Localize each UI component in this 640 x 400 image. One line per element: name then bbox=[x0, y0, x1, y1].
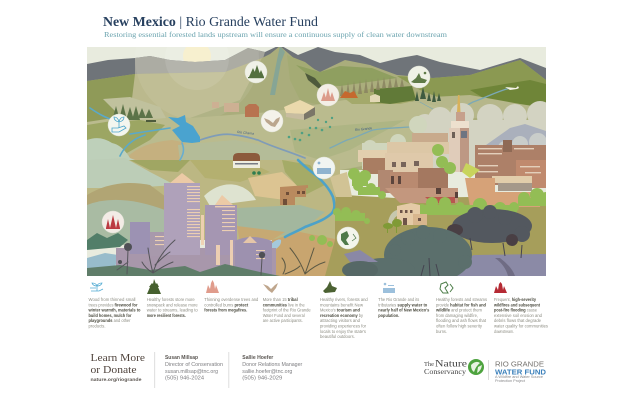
crop fields bbox=[288, 117, 333, 141]
column 3: thinning: controlled burns protect bbox=[204, 302, 249, 307]
column 3: thinning bbox=[204, 280, 259, 313]
bell tower bbox=[449, 95, 469, 172]
column 2: healthy forests: water to streams, leading to bbox=[147, 308, 198, 313]
column 1: forest products: winter warmth, materials to bbox=[88, 308, 141, 313]
back mountain ridge bbox=[87, 47, 546, 81]
icon: sapling in hand bbox=[90, 283, 103, 291]
green shrubs bbox=[309, 144, 552, 247]
contact: Sallie Hoefer: Donor Relations Manager bbox=[242, 362, 303, 368]
column 5: tourism bbox=[320, 281, 368, 339]
column 8: post-fire flooding: post-fire flooding cause bbox=[494, 308, 537, 313]
call to action: learn more: Learn More bbox=[90, 352, 145, 364]
column 4: tribal communities: Water Fund and several bbox=[263, 313, 305, 318]
map icon: handshake bbox=[261, 110, 283, 132]
column 7: fish and wildlife: from damaging wildfire, bbox=[436, 313, 478, 318]
column 4: tribal communities bbox=[263, 283, 311, 323]
column 7: fish and wildlife: often follow high severity bbox=[436, 324, 483, 328]
column 8: post-fire flooding: extensive soil erosion and bbox=[494, 313, 543, 318]
subtitle: Restoring essential forested lands upstream will ensure a continuous supply of clean water downstream bbox=[104, 30, 447, 39]
town bbox=[358, 133, 546, 207]
column 5: tourism: attracting visitors and bbox=[320, 318, 361, 323]
column 1: forest products: trees provides firewood for bbox=[88, 302, 138, 307]
column 3: thinning: Thinning overdense trees and bbox=[204, 297, 259, 302]
ranch barn bbox=[284, 100, 315, 120]
column 7: fish and wildlife: wildlife and protect them bbox=[435, 308, 482, 313]
call to action: learn more: or Donate bbox=[90, 364, 137, 376]
contact: Sallie Hoefer: sallie.hoefer@tnc.org bbox=[242, 369, 293, 375]
column 3: thinning: forests from megafires. bbox=[204, 308, 247, 313]
logo: Rio Grande Water Fund: RIO GRANDE bbox=[495, 360, 544, 368]
foreground vegetation left bbox=[87, 233, 325, 276]
column 8: post-fire flooding: debris flows that degrade bbox=[494, 318, 542, 323]
icon: bird and fish bbox=[440, 282, 453, 293]
icon: water town bbox=[383, 283, 395, 293]
column 7: fish and wildlife bbox=[435, 282, 488, 334]
logo: The Nature Conservancy: Nature bbox=[435, 360, 467, 370]
logo: Rio Grande Water Fund: A Wildfire and Water Source bbox=[495, 375, 543, 379]
map icon: fish and wildlife bbox=[337, 227, 359, 249]
small green trees bbox=[383, 219, 402, 233]
logo: Rio Grande Water Fund: WATER FUND bbox=[495, 368, 546, 376]
city skyline bbox=[116, 173, 276, 276]
pale ridge with conifers bbox=[103, 97, 166, 121]
column 5: tourism: locals to enjoy the state's bbox=[320, 329, 367, 334]
icon: conifers bbox=[147, 279, 161, 294]
column 5: tourism: Mexico's tourism and bbox=[320, 308, 360, 313]
column 4: tribal communities: More than 15 tribal bbox=[263, 297, 298, 302]
contact: Sallie Hoefer: (505) 946-2029 bbox=[242, 376, 283, 382]
column 1: forest products: build homes, mulch for bbox=[88, 313, 132, 318]
contact: Sallie Hoefer bbox=[242, 355, 303, 382]
logo: The Nature Conservancy bbox=[424, 359, 484, 376]
visitor center building bbox=[233, 153, 261, 175]
contact: Susan Millsap: Director of Conservation bbox=[165, 362, 223, 368]
river label Rio Grande: Rio Grande bbox=[355, 126, 372, 132]
logo: The Nature Conservancy: Conservancy bbox=[424, 367, 466, 376]
column 6: water supply: The Rio Grande and its bbox=[378, 297, 420, 302]
pueblo house on the valley floor bbox=[280, 185, 308, 205]
column 5: tourism: recreation economy by bbox=[320, 313, 364, 318]
column 5: tourism: mountains benefit New bbox=[320, 302, 364, 307]
contact: Susan Millsap: susan.millsap@tnc.org bbox=[165, 369, 218, 375]
column 8: post-fire flooding: downstream. bbox=[494, 329, 514, 334]
logo: Rio Grande Water Fund bbox=[495, 360, 546, 383]
call to action: learn more bbox=[90, 352, 145, 383]
column 8: post-fire flooding: Frequent, high-severity bbox=[494, 297, 536, 302]
cloud bank right bbox=[419, 101, 546, 168]
map icon: healthy forest bbox=[245, 61, 267, 83]
column 1: forest products: products. bbox=[88, 324, 106, 328]
column 8: post-fire flooding: wildfires and subsequent bbox=[493, 302, 540, 307]
cloud bank left of town bbox=[362, 116, 418, 169]
contact: Susan Millsap: (505) 946-2024 bbox=[165, 376, 204, 382]
column 2: healthy forests: more resilient forests. bbox=[147, 313, 186, 318]
airplane bbox=[505, 86, 519, 90]
column 2: healthy forests: snowpack and release more bbox=[147, 302, 198, 307]
title: New Mexico | Rio Grande Water Fund bbox=[103, 14, 318, 29]
river label Rio Chama: Rio Chama bbox=[237, 130, 254, 136]
icon: red trees bbox=[494, 282, 507, 293]
column 4: tribal communities: footprint of the Rio Grande bbox=[263, 308, 311, 313]
dark oak trees bbox=[342, 205, 546, 283]
column 6: water supply: nearly half of New Mexico's bbox=[378, 308, 430, 313]
column 8: post-fire flooding: water quality for communities bbox=[494, 324, 549, 328]
foreground pueblo bbox=[388, 203, 427, 226]
mid valley shapes bbox=[87, 100, 450, 170]
contact: Susan Millsap: Susan Millsap bbox=[165, 355, 198, 361]
column 6: water supply: tributaries supply water to bbox=[378, 302, 428, 307]
hillside pueblos bbox=[212, 102, 239, 112]
column 7: fish and wildlife: flooding and ash flows that bbox=[436, 318, 487, 323]
panel: watershed illustration bbox=[87, 47, 546, 276]
rivers bbox=[90, 88, 510, 237]
column 1: forest products: Wood from thinned small bbox=[88, 297, 136, 302]
icon: handshake bbox=[263, 283, 278, 293]
column 7: fish and wildlife: provide habitat for fish and bbox=[436, 302, 486, 307]
icon: pink trees bbox=[206, 280, 219, 293]
column 4: tribal communities: are active participants. bbox=[263, 318, 303, 323]
column 1: forest products: playgrounds and other bbox=[88, 318, 131, 323]
wildfire on slope bbox=[340, 91, 358, 98]
column 2: healthy forests bbox=[147, 279, 198, 318]
small lodge bbox=[370, 94, 380, 102]
map icon: sapling in hand bbox=[108, 114, 130, 136]
map icon: water supply bbox=[313, 157, 335, 179]
mountain flanks and hills bbox=[87, 46, 546, 170]
column 6: water supply bbox=[378, 283, 430, 318]
logo: Rio Grande Water Fund: Protection Project bbox=[495, 379, 525, 383]
logo: The Nature Conservancy: The bbox=[424, 362, 434, 368]
column 5: tourism: beautiful outdoors. bbox=[320, 334, 355, 339]
map icon: post-fire flooding bbox=[102, 211, 124, 233]
upland forest bbox=[340, 77, 404, 96]
contact: Susan Millsap bbox=[165, 355, 223, 382]
map icon: recreation bbox=[408, 66, 430, 88]
column 5: tourism: providing experiences for bbox=[320, 324, 366, 328]
column 6: water supply: population. bbox=[378, 313, 399, 318]
olive ground bbox=[325, 195, 546, 276]
call to action: learn more: nature.org/riogrande bbox=[90, 377, 142, 383]
column 5: tourism: Healthy rivers, forests and bbox=[320, 297, 368, 302]
contact: Sallie Hoefer: Sallie Hoefer bbox=[242, 355, 273, 361]
column 1: forest products bbox=[88, 283, 141, 328]
column 2: healthy forests: Healthy forests store more bbox=[147, 297, 195, 302]
column 8: post-fire flooding bbox=[493, 282, 549, 334]
icon: recreation bbox=[323, 281, 337, 293]
column 7: fish and wildlife: burns. bbox=[436, 329, 447, 334]
map icon: thinning pink trees bbox=[317, 84, 339, 106]
column 4: tribal communities: communities live in the bbox=[263, 302, 305, 307]
column 7: fish and wildlife: Healthy forests and streams bbox=[436, 297, 488, 302]
